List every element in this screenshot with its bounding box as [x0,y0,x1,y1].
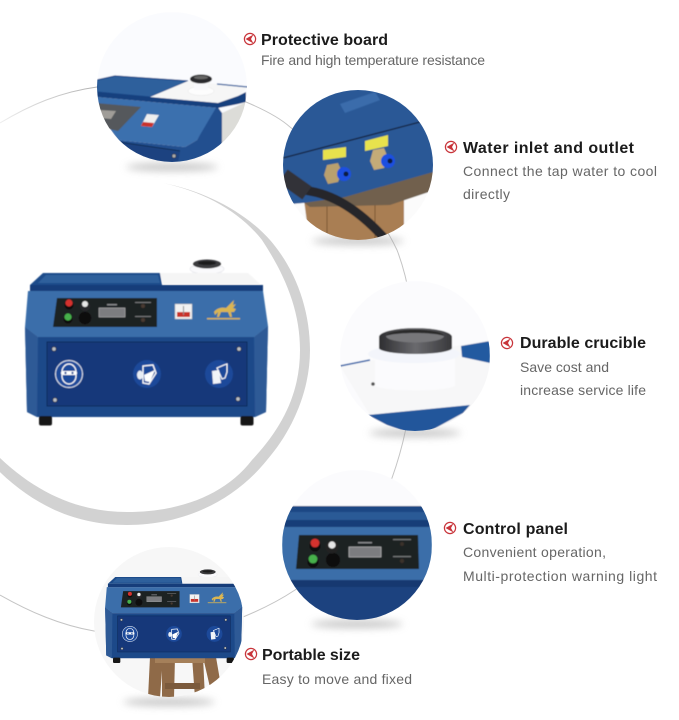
small bolt [371,382,375,386]
ring opening [386,332,444,342]
grey crescent ring [0,183,310,525]
stool top [304,171,433,208]
description: Multi-protection warning light [463,568,657,584]
right blue tray [461,341,490,363]
main furnace machine [25,260,268,426]
label: inlet [323,147,346,160]
right chamfer [118,107,223,162]
gold horse logo [207,300,240,319]
wooden stool [148,655,222,698]
icon: mask sign [133,360,161,388]
breaker [141,114,159,127]
icon: red arrow [501,337,513,349]
heading: Protective board [261,32,388,49]
description: Connect the tap water to cool [463,163,657,179]
photo: control panel [282,470,432,622]
photo: water inlet and outlet [283,90,433,240]
grey side [222,102,246,148]
icon: red arrow [244,33,256,45]
plate [340,340,490,440]
top bump [340,92,380,113]
description [520,359,646,398]
description: Easy to move and fixed [262,671,412,687]
wooden stool [304,200,405,240]
upper body [25,291,268,337]
icon: goggles sign [56,360,82,388]
black control panel [53,298,157,327]
graphite ring [379,328,452,354]
heading: Durable crucible [520,335,646,352]
crucible body [375,356,455,390]
buttons [308,539,320,568]
white collar [378,350,396,354]
board plate [150,80,234,100]
heading: Control panel [463,521,568,538]
icon: red arrow [445,141,457,153]
blue back body [283,90,433,204]
description: Save cost and [520,359,609,375]
protective plate [160,273,260,284]
lid band [30,285,263,291]
icon: red arrow [245,648,257,660]
photo shadows [123,163,461,706]
knob [326,540,340,567]
cable sleeve [283,176,307,193]
crucible [188,86,214,96]
indicator lights [358,539,411,563]
heading: Portable size [262,647,360,664]
description [463,544,657,584]
lid band [97,92,246,108]
label: outlet [365,135,388,151]
right edge line [217,84,248,87]
description [463,163,657,202]
circuit breaker [175,304,192,319]
display [349,547,381,557]
fitting: inlet [324,163,351,184]
photo: portable size [94,547,244,698]
lower body [25,326,268,417]
black panel [95,103,141,131]
panel plate [296,535,419,569]
upper body [97,97,218,147]
door screws [52,347,241,402]
callout: control panel [444,521,657,584]
left blue edge [340,360,370,366]
callout: protective board [244,32,485,68]
connecting line around the photos [0,85,414,635]
heading: Water inlet and outlet [463,140,635,157]
lower door [120,143,180,162]
crucible on main machine [190,260,224,281]
tray [97,76,188,97]
black cable [302,190,386,240]
right side chamfer [254,326,268,417]
description: Fire and high temperature resistance [261,52,485,68]
display [100,110,116,119]
description: increase service life [520,382,646,398]
front door panel [47,342,247,406]
panel controls [64,299,151,324]
description: Convenient operation, [463,544,606,560]
callout: durable crucible [501,335,646,398]
bottom blue edge [368,405,470,433]
icon: gloves sign [205,360,233,388]
small machine [105,569,242,663]
callout: water inlet and outlet [445,140,657,202]
seam [283,122,420,158]
tray [30,273,162,285]
photo: durable crucible [340,281,490,440]
callout: portable size [245,647,412,687]
feet [39,416,254,426]
photo: protective board [97,74,247,162]
left side chamfer [25,327,38,417]
fitting: outlet [370,148,395,170]
description: directly [463,186,510,202]
icon: red arrow [444,522,456,534]
